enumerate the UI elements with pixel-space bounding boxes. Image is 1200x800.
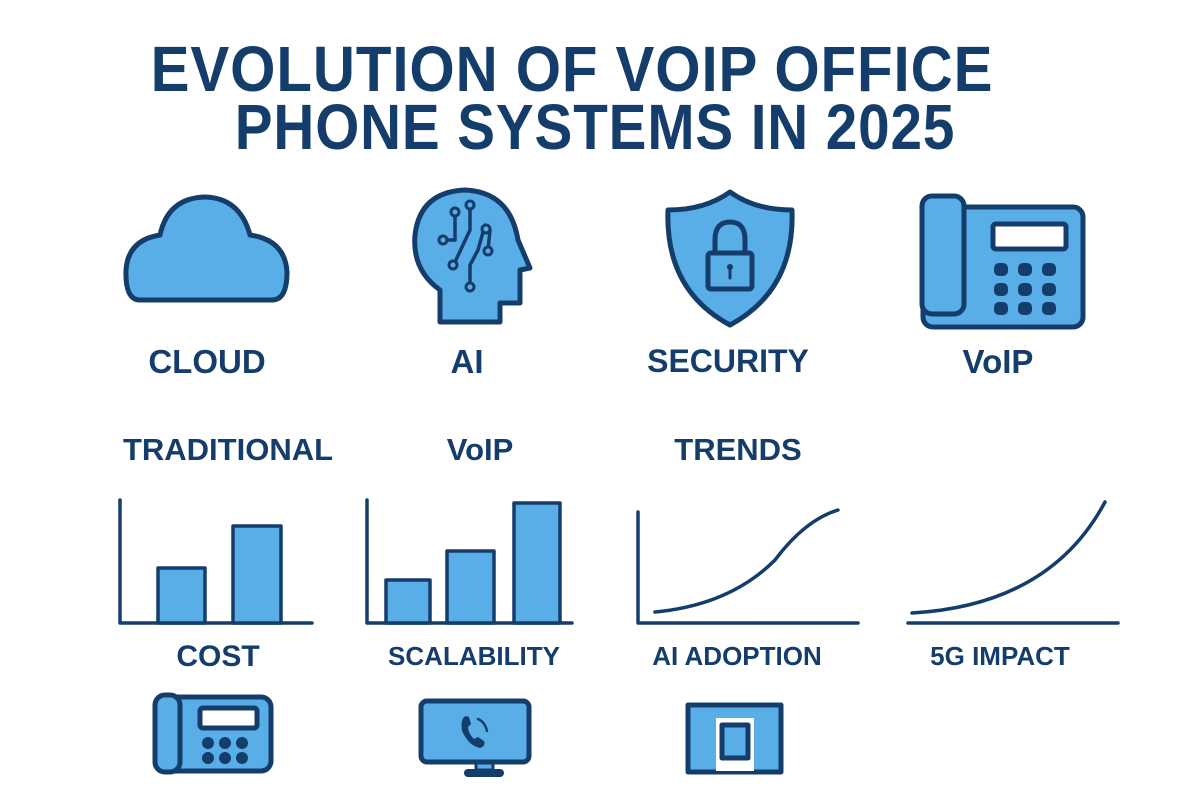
label: AI: AI	[450, 343, 484, 380]
icon: shield	[668, 192, 792, 325]
label: VoIP: VoIP	[963, 343, 1033, 380]
heading: trends: TRENDS	[674, 432, 802, 467]
icon: AI head	[415, 190, 530, 322]
label: 5G impact: 5G IMPACT	[930, 641, 1070, 671]
icon: desk phone	[922, 196, 1083, 327]
heading: VoIP: VoIP	[447, 432, 513, 467]
label: cost: COST	[176, 640, 260, 673]
title: PHONE SYSTEMS IN 2025	[235, 91, 955, 163]
label: security: SECURITY	[647, 343, 809, 379]
heading: traditional: TRADITIONAL	[123, 432, 333, 467]
label: scalability: SCALABILITY	[388, 641, 560, 671]
label: AI adoption: AI ADOPTION	[652, 641, 822, 671]
icon: monitor with call	[421, 701, 529, 776]
chart: scalability	[367, 500, 572, 623]
title: EVOLUTION OF VOIP OFFICE	[151, 33, 993, 105]
chart: AI adoption	[638, 510, 858, 623]
title	[151, 33, 993, 163]
icon: cloud	[126, 197, 287, 300]
icon: tablet	[688, 705, 781, 772]
icon: bottom phone	[155, 695, 271, 772]
chart: 5G impact	[908, 502, 1118, 623]
chart: cost	[120, 500, 312, 623]
label: cloud: CLOUD	[148, 343, 266, 380]
